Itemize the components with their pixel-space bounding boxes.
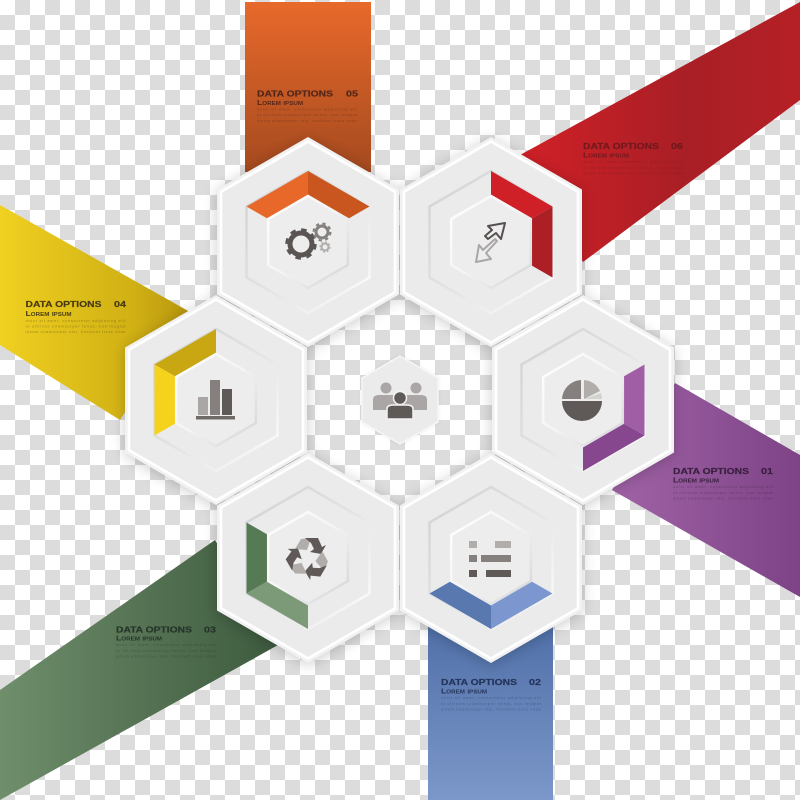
- text: option 03: ut ultrices ullamcorper tellus, non feugiat: [116, 648, 217, 653]
- text: option 06: 06: [671, 141, 683, 151]
- band: blue 02: [428, 620, 553, 800]
- text: option 06: DATA OPTIONS: [583, 141, 659, 151]
- text: option 06: dolor sit amet, consectetur adipiscing elit: [583, 159, 684, 164]
- text: option 03: 03: [204, 624, 216, 634]
- text: option 03: [116, 624, 217, 658]
- text: option 04: ipsum ullamcorper nisi, tincidunt risus vitae: [26, 329, 126, 334]
- text: option 02: 02: [529, 677, 541, 687]
- text: option 04: DATA OPTIONS: [26, 299, 102, 309]
- icon: people: [373, 382, 427, 419]
- hexagon: bottom right, list: [400, 453, 582, 663]
- text: option 04: [26, 299, 126, 334]
- text: option 02: dolor sit amet, consectetur adipiscing elit: [441, 695, 542, 700]
- text: option 03: dolor sit amet, consectetur adipiscing elit: [116, 642, 217, 647]
- text: option 05: 05: [346, 88, 358, 98]
- text: option 02: Lorem ipsum: [441, 688, 487, 696]
- band: green 03: [0, 540, 278, 800]
- text: option 01: [673, 466, 774, 500]
- segment: yellow: [154, 329, 216, 436]
- text: option 04: Lorem ipsum: [26, 311, 72, 318]
- text: option 06: Lorem ipsum: [583, 152, 629, 160]
- segment: blue: [430, 581, 552, 629]
- text: option 03: DATA OPTIONS: [116, 624, 192, 634]
- text: option 06: [583, 141, 684, 176]
- segment: orange: [246, 171, 370, 219]
- center hexagon: team: [362, 356, 438, 444]
- hexagon: bottom left, recycle: [217, 453, 399, 663]
- text: option 01: ut ultrices ullamcorper tellus, non feugiat: [673, 490, 774, 495]
- hexagon: top right, arrows: [400, 137, 582, 347]
- hexagon: top left, gears: [217, 137, 399, 347]
- segment: red: [491, 171, 552, 278]
- band: yellow 04: [0, 205, 190, 420]
- hexagon: left, chart: [125, 295, 307, 505]
- text: option 06: ut ultrices ullamcorper tellus, non feugiat: [583, 165, 684, 170]
- text: option 04: ut ultrices ullamcorper tellus, non feugiat: [26, 324, 126, 328]
- text: option 04: dolor sit amet, consectetur adipiscing elit: [26, 318, 126, 323]
- icon: pie chart: [562, 380, 602, 421]
- text: option 01: Lorem ipsum: [673, 478, 719, 484]
- icon: list: [469, 541, 511, 577]
- text: option 03: Lorem ipsum: [116, 636, 162, 642]
- text: option 02: [441, 677, 542, 712]
- text: option 04: 04: [114, 299, 126, 309]
- text: option 02: ipsum ullamcorper nisi, tincidunt risus vitae: [441, 706, 542, 712]
- band: orange 05: [245, 2, 371, 172]
- text: option 06: ipsum ullamcorper nisi, tincidunt risus vitae: [583, 170, 684, 176]
- text: option 01: dolor sit amet, consectetur adipiscing elit: [673, 484, 774, 489]
- segment: green: [246, 522, 308, 629]
- icon: arrows: [476, 223, 505, 262]
- text: option 02: DATA OPTIONS: [441, 677, 517, 687]
- text: option 01: 01: [761, 466, 773, 476]
- text: option 01: ipsum ullamcorper nisi, tincidunt risus vitae: [673, 496, 774, 500]
- text: option 03: ipsum ullamcorper nisi, tincidunt risus vitae: [116, 654, 217, 658]
- text: option 05: Lorem ipsum: [257, 100, 303, 107]
- hexagon: right, pie: [492, 295, 674, 505]
- icon: recycle: [282, 538, 332, 584]
- text: option 05: ipsum ullamcorper nisi, tincidunt risus vitae: [257, 118, 358, 123]
- text: option 05: DATA OPTIONS: [257, 88, 333, 98]
- icon: bar chart: [196, 380, 235, 420]
- hexagon soft shadows: [125, 139, 674, 665]
- segment: purple: [583, 364, 644, 471]
- icon: gears: [287, 224, 330, 258]
- band: red 06: [520, 2, 800, 262]
- text: option 02: ut ultrices ullamcorper tellus, non feugiat: [441, 701, 542, 706]
- text: option 05: dolor sit amet, consectetur adipiscing elit: [257, 106, 358, 112]
- band: purple 01: [612, 383, 800, 597]
- text: option 01: DATA OPTIONS: [673, 466, 749, 476]
- text: option 05: [257, 88, 358, 123]
- text: option 05: ut ultrices ullamcorper tellus, non feugiat: [257, 112, 358, 117]
